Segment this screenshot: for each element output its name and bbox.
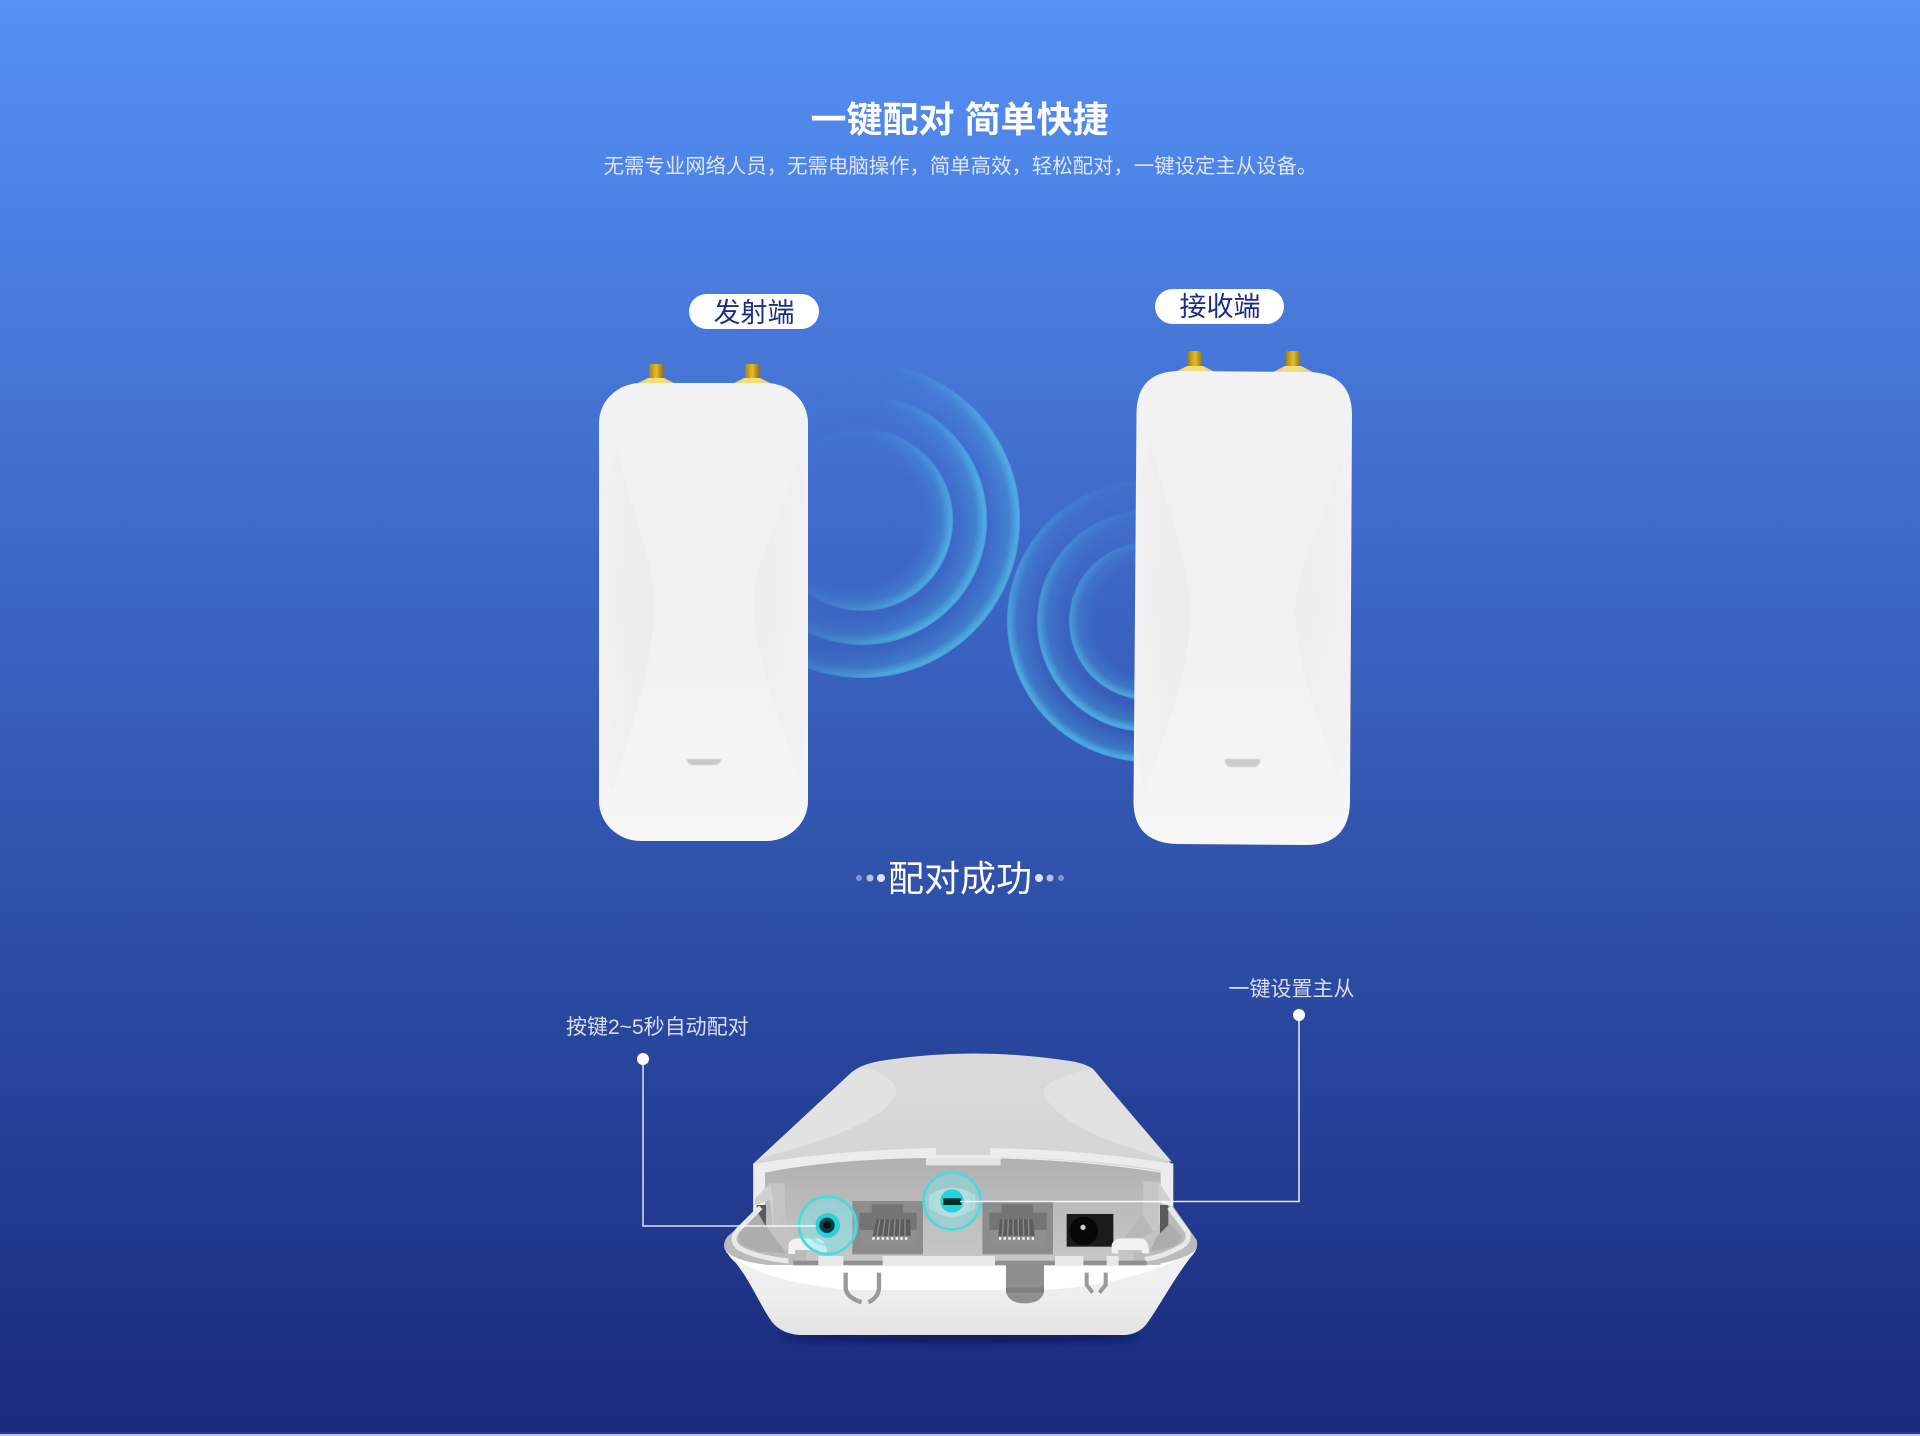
indicator slot bbox=[687, 759, 721, 765]
title: 一键配对 简单快捷 bbox=[810, 99, 1109, 140]
back wall bbox=[754, 1157, 1173, 1217]
label pill: receiver: 接收端 bbox=[1180, 292, 1260, 322]
pairing button highlight bbox=[799, 1197, 856, 1254]
clips and pull tab bbox=[846, 1273, 879, 1302]
housing bbox=[599, 383, 808, 841]
signal waves: transmitter bbox=[808, 371, 1020, 678]
master/slave switch highlight bbox=[924, 1173, 980, 1229]
right tray corner bbox=[1125, 1182, 1197, 1265]
white front band bbox=[726, 1240, 1193, 1290]
side shading bbox=[1136, 440, 1190, 790]
latch tabs bbox=[788, 1238, 827, 1254]
ground shadow bbox=[782, 1331, 1142, 1343]
antenna connectors bbox=[636, 364, 772, 384]
subtitle: 无需专业网络人员，无需电脑操作，简单高效，轻松配对，一键设定主从设备。 bbox=[604, 155, 1317, 178]
left tray corner bbox=[724, 1183, 807, 1265]
antenna connectors bbox=[1175, 351, 1313, 372]
device: opened port view bbox=[724, 1054, 1197, 1343]
left lan port bbox=[852, 1201, 923, 1254]
cover highlights bbox=[753, 1067, 896, 1164]
cover front rim bbox=[753, 1148, 1173, 1172]
lower base bbox=[725, 1243, 1197, 1335]
cover latch notch bbox=[926, 1158, 1001, 1165]
device: transmitter bbox=[599, 364, 808, 841]
indicator slot bbox=[1225, 759, 1260, 767]
status heading with dots: 配对成功 bbox=[888, 858, 1032, 899]
device: receiver bbox=[1134, 351, 1352, 845]
label pill: receiver bbox=[1155, 289, 1284, 324]
callout: pairing button: 按键2~5秒自动配对 bbox=[566, 1016, 749, 1039]
right lan port bbox=[982, 1201, 1053, 1254]
callout: master slave switch: 一键设置主从 bbox=[1228, 978, 1354, 1001]
callout: pairing button bbox=[566, 1016, 816, 1226]
callout: master slave switch bbox=[960, 978, 1354, 1202]
top cover bbox=[753, 1054, 1173, 1215]
port cavity bbox=[724, 1157, 1197, 1303]
tray bar bbox=[793, 1261, 1147, 1265]
signal waves: receiver bbox=[1007, 492, 1136, 762]
side shading bbox=[600, 450, 654, 790]
label pill: transmitter bbox=[689, 294, 819, 329]
status heading with dots bbox=[856, 858, 1064, 899]
power jack bbox=[1067, 1214, 1113, 1247]
label pill: transmitter: 发射端 bbox=[714, 298, 794, 328]
housing bbox=[1134, 371, 1352, 845]
